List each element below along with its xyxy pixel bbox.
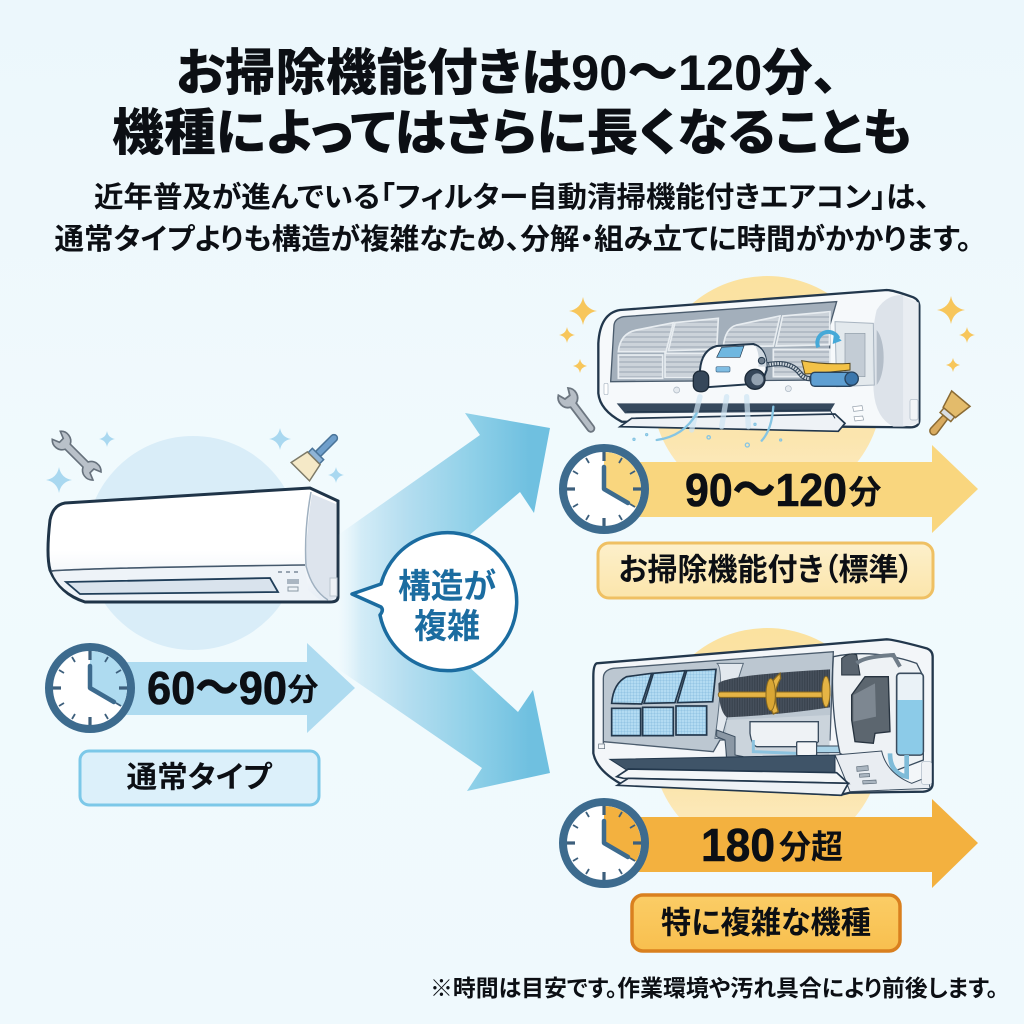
panel: cleaning function model <box>555 276 975 506</box>
icon: brush <box>922 391 970 442</box>
label: standard type <box>80 751 319 805</box>
time arrow: over 180 min <box>635 799 978 888</box>
subtitle text block: 近年普及が進んでいる「フィルター自動清掃機能付きエアコン」は、 <box>94 180 930 214</box>
label: standard type: 通常タイプ <box>126 762 273 794</box>
cleaning robot <box>693 344 767 392</box>
panel: standard type <box>46 426 346 650</box>
time unit: minutes or more: 分超 <box>779 828 843 866</box>
label: especially complex: 特に複雑な機種 <box>661 906 871 940</box>
time unit: 分 <box>288 672 318 708</box>
air conditioner: internal structure <box>593 639 933 795</box>
title <box>112 45 912 161</box>
panel: complex model <box>593 628 933 858</box>
title: お掃除機能付きは90〜120分、 <box>176 45 838 101</box>
callout: complex structure: 構造が <box>398 567 496 606</box>
icon: sparkles yellow <box>559 296 975 373</box>
time value: 90-120: 90〜120 <box>685 464 847 516</box>
subtitle text block: 通常タイプよりも構造が複雑なため、分解・組み立てに時間がかかります。 <box>54 222 971 256</box>
callout: complex structure: 複雑 <box>414 608 480 646</box>
big arrows: branching to both models <box>338 413 550 791</box>
icon: brush <box>291 426 346 481</box>
water spray <box>633 397 782 447</box>
highlight circle: cleaning <box>652 276 882 506</box>
label: especially complex <box>632 895 900 951</box>
label: cleaning standard: お掃除機能付き（標準） <box>618 552 914 588</box>
footnote: ※時間は目安です。作業環境や汚れ具合により前後します。 <box>430 975 998 1001</box>
subtitle text block <box>54 180 971 256</box>
cleaning hose and brush <box>767 332 858 386</box>
title: 機種によってはさらに長くなることも <box>112 105 912 161</box>
highlight circle: complex <box>652 628 882 858</box>
air conditioner: with cleaning robot <box>598 290 919 447</box>
icon: clock cleaning <box>563 448 645 530</box>
icon: wrench <box>50 429 103 482</box>
icon: sparkles blue <box>46 428 344 493</box>
icon: clock complex <box>563 802 645 884</box>
time arrow: 90-120 min <box>635 445 978 533</box>
label: cleaning standard <box>598 543 933 598</box>
air conditioner: standard <box>48 488 338 602</box>
time value: 60-90: 60〜90 <box>147 662 287 714</box>
icon: clock standard <box>49 647 131 729</box>
icon: wrench <box>555 386 601 437</box>
time arrow: 60-90 min <box>125 643 355 733</box>
highlight circle: standard <box>86 436 300 650</box>
time unit: 分 <box>848 474 882 510</box>
callout: complex structure <box>352 533 517 671</box>
time value: 180: 180 <box>701 819 775 871</box>
